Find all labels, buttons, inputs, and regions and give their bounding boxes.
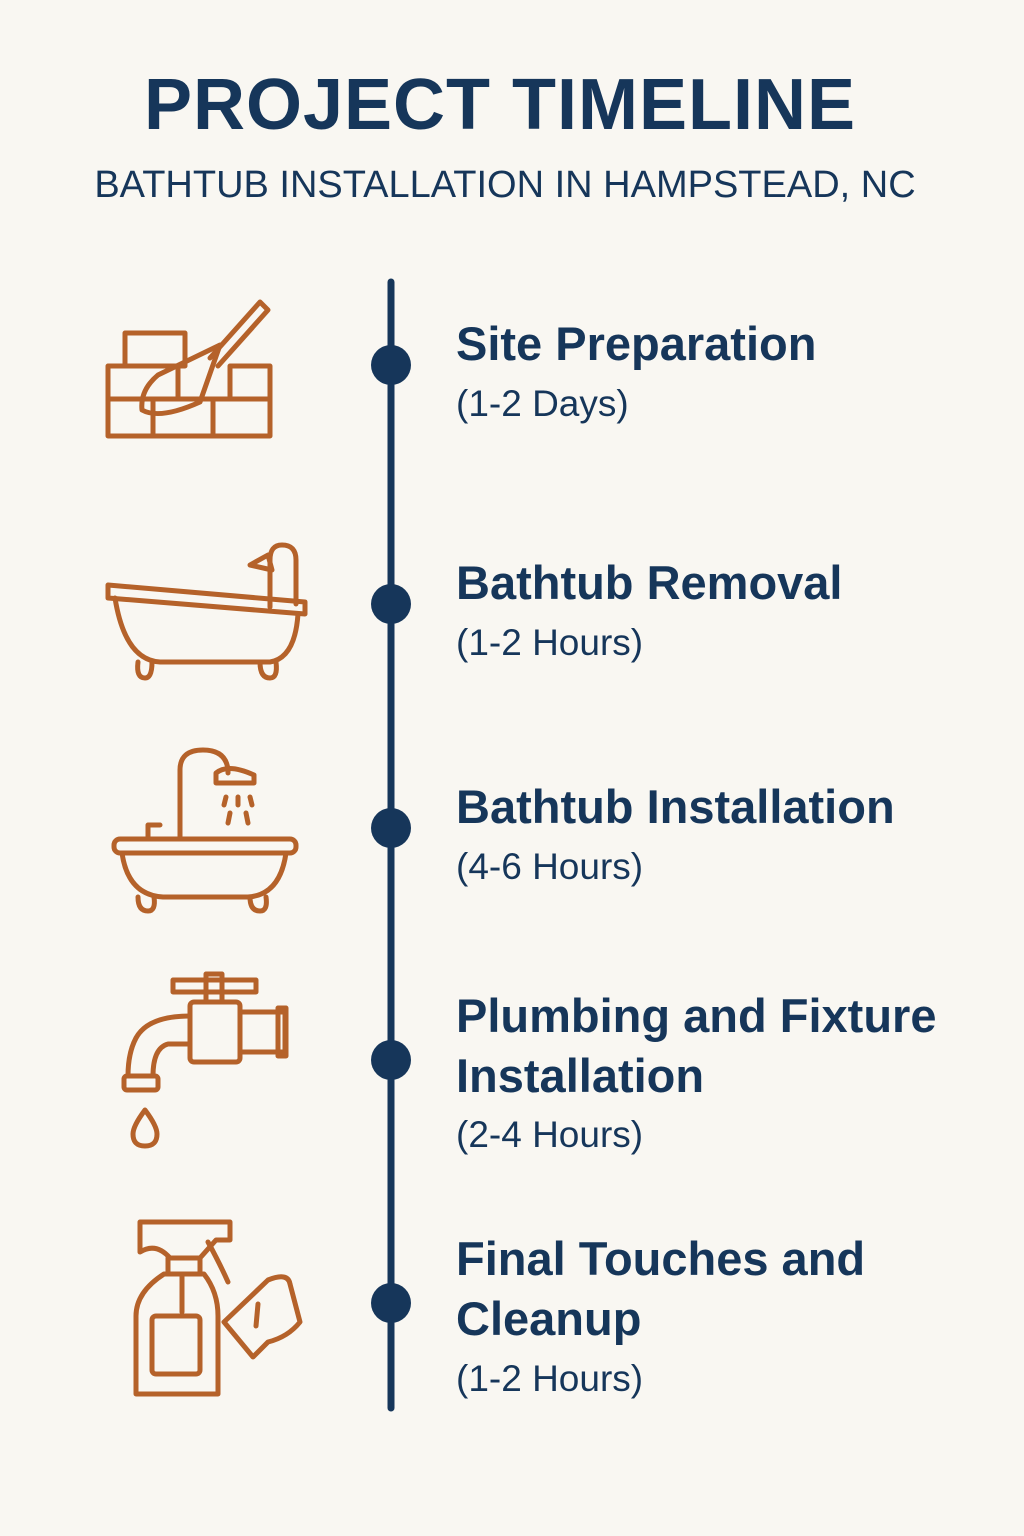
step 5 <box>456 1232 865 1399</box>
text: (1-2 Days) <box>456 383 629 424</box>
title: PROJECT TIMELINE <box>144 65 856 145</box>
text: (2-4 Hours) <box>456 1114 643 1155</box>
step 3 <box>456 780 895 887</box>
timeline <box>371 278 411 1412</box>
text: Plumbing and Fixture <box>456 989 936 1042</box>
text: Installation <box>456 1049 704 1102</box>
text: Final Touches and <box>456 1232 865 1285</box>
step 4 <box>456 989 936 1155</box>
icon: faucet with drop <box>122 972 288 1148</box>
text: (4-6 Hours) <box>456 846 643 887</box>
icon: clawfoot bathtub <box>106 542 308 680</box>
subtitle: BATHTUB INSTALLATION IN HAMPSTEAD, NC <box>94 164 916 206</box>
text: Site Preparation <box>456 317 816 370</box>
text: (1-2 Hours) <box>456 622 643 663</box>
icon: bricks and trowel <box>106 300 272 438</box>
text: Bathtub Installation <box>456 780 895 833</box>
step 1 <box>456 317 816 424</box>
text: Bathtub Removal <box>456 556 842 609</box>
text: (1-2 Hours) <box>456 1358 643 1399</box>
text: Cleanup <box>456 1292 641 1345</box>
icon: bathtub with shower <box>112 748 298 914</box>
icon: spray bottle and cloth <box>134 1220 302 1396</box>
step 2 <box>456 556 842 663</box>
